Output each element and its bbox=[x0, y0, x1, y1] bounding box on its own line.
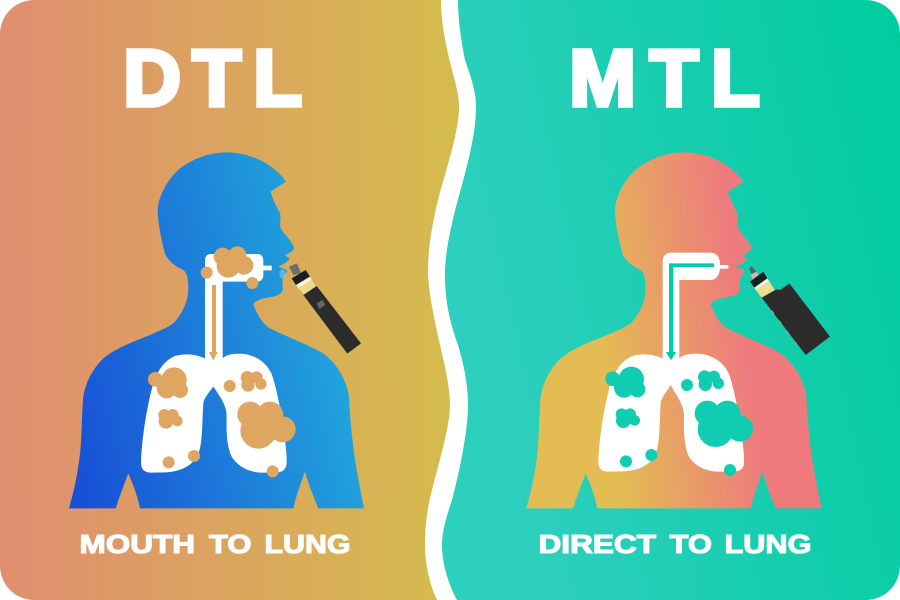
figure: MTL person bbox=[526, 152, 830, 508]
panel: MTL background bbox=[442, 0, 900, 600]
lungs and airway bbox=[141, 254, 287, 473]
smoke clouds bbox=[605, 367, 753, 476]
label: mouth to lung bbox=[80, 531, 350, 559]
body silhouette bbox=[526, 152, 821, 508]
label: direct to lung bbox=[538, 531, 812, 559]
label: direct to lung: DIRECT bbox=[538, 531, 657, 559]
smoke clouds bbox=[148, 246, 296, 477]
vape pen bbox=[289, 263, 361, 354]
airflow arrow bbox=[666, 263, 714, 360]
lungs and airway bbox=[598, 253, 744, 472]
label: mouth to lung: LUNG bbox=[264, 531, 350, 559]
label: mouth to lung: MOUTH bbox=[80, 531, 195, 559]
vapor at mouth bbox=[279, 269, 286, 279]
panel: DTL background bbox=[0, 0, 459, 600]
label: direct to lung: LUNG bbox=[724, 531, 812, 559]
body silhouette bbox=[69, 152, 364, 508]
heading: DTL: DTL bbox=[123, 34, 302, 122]
heading: MTL: MTL bbox=[569, 34, 760, 122]
label: mouth to lung: TO bbox=[209, 531, 252, 559]
label: direct to lung: TO bbox=[670, 531, 712, 559]
vape box mod bbox=[749, 266, 830, 355]
airflow arrow bbox=[209, 285, 218, 361]
figure: DTL person bbox=[69, 152, 364, 508]
